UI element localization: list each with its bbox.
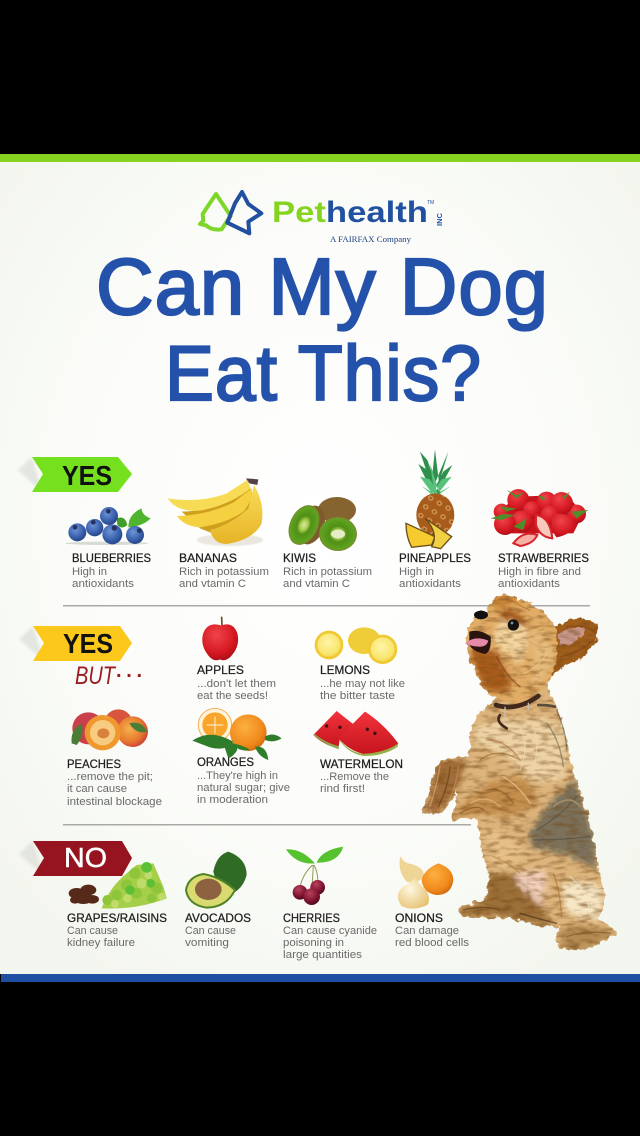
- text: strawberries: STRAWBERRIES: [498, 551, 589, 565]
- dog fur strands: [430, 597, 610, 937]
- icon: grapes and raisins: [69, 862, 167, 909]
- panel: NO: [19, 841, 469, 961]
- icon: bananas: [168, 478, 263, 546]
- text: onions: [395, 911, 469, 949]
- icon: cat and dog outlines: [200, 192, 261, 233]
- text: lemons: [320, 663, 405, 702]
- text: kiwis: [283, 551, 372, 590]
- top black band: [0, 0, 640, 154]
- bottom black band: [0, 982, 640, 1136]
- ribbon: NO: [19, 841, 132, 876]
- text: pineapples: antioxidants: [399, 578, 461, 590]
- text: avocados: Can cause: [185, 925, 236, 937]
- text: bananas: Rich in potassium: [179, 566, 269, 578]
- text: oranges: ORANGES: [197, 755, 254, 769]
- text: onions: red blood cells: [395, 937, 469, 949]
- text: oranges: in moderation: [197, 794, 268, 806]
- text: bananas: [179, 551, 269, 590]
- text: strawberries: antioxidants: [498, 578, 560, 590]
- text: grapes: [67, 911, 167, 949]
- dog body: [422, 680, 617, 950]
- logo: Pethealth: [200, 192, 444, 244]
- panel: YES: [18, 449, 589, 590]
- text: blueberries: BLUEBERRIES: [72, 551, 151, 565]
- ribbon: YES BUT: BUT: [75, 662, 116, 690]
- text: oranges: [197, 755, 290, 806]
- text: peaches: PEACHES: [67, 757, 121, 771]
- INC: INC: [435, 212, 444, 226]
- dog face: [465, 611, 519, 654]
- poster background: [0, 162, 640, 974]
- dog illustration: [422, 594, 617, 950]
- title: [96, 242, 549, 417]
- text: strawberries: [498, 551, 589, 590]
- text: onions: ONIONS: [395, 911, 443, 925]
- text: avocados: AVOCADOS: [185, 911, 251, 925]
- ribbon: YES: [18, 457, 132, 492]
- text: cherries: [283, 911, 377, 961]
- text: grapes: Can cause: [67, 925, 118, 937]
- icon: pineapple: [406, 449, 454, 549]
- dog collar: [496, 696, 555, 728]
- icon: cherries: [286, 847, 343, 905]
- text: avocados: vomiting: [185, 937, 229, 949]
- text: watermelon: rind first!: [320, 783, 365, 795]
- text: pineapples: [399, 551, 471, 590]
- text: lemons: the bitter taste: [320, 690, 395, 702]
- bottom blue bar: [1, 974, 640, 982]
- icon: strawberries: [491, 489, 588, 546]
- text: apples: eat the seeds!: [197, 690, 268, 702]
- text: lemons: LEMONS: [320, 663, 370, 677]
- text: kiwis: Rich in potassium: [283, 566, 372, 578]
- text: cherries: Can cause cyanide: [283, 925, 377, 937]
- icon: apple: [202, 617, 238, 660]
- ribbon: YES: YES: [62, 460, 112, 491]
- text: kiwis: KIWIS: [283, 551, 316, 565]
- text: kiwis: and vtamin C: [283, 578, 350, 590]
- icon: watermelon: [313, 711, 398, 756]
- text: oranges: natural sugar; give: [197, 782, 290, 794]
- icon: peaches: [71, 709, 148, 750]
- text: blueberries: antioxidants: [72, 578, 134, 590]
- ribbon: NO: NO: [64, 842, 107, 873]
- text: peaches: intestinal blockage: [67, 796, 162, 808]
- text: cherries: large quantities: [283, 949, 362, 961]
- icon: avocado: [186, 852, 247, 908]
- text: pineapples: PINEAPPLES: [399, 551, 471, 565]
- text: apples: APPLES: [197, 663, 244, 677]
- text: cherries: poisoning in: [283, 937, 344, 949]
- icon: lemons: [315, 627, 397, 664]
- icon: onions: [398, 856, 453, 909]
- text: oranges: ...They're high in: [197, 770, 278, 782]
- text: watermelon: WATERMELON: [320, 757, 403, 771]
- wordmark: Pethealth: [272, 196, 428, 229]
- trademark: TM: [427, 200, 434, 206]
- text: apples: ...don't let them: [197, 678, 276, 690]
- top green bar: [0, 154, 640, 162]
- text: watermelon: [320, 757, 403, 795]
- text: blueberries: High in: [72, 566, 107, 578]
- text: watermelon: ...Remove the: [320, 771, 389, 783]
- title line 2: Eat This?: [165, 329, 482, 417]
- text: bananas: and vtamin C: [179, 578, 246, 590]
- text: apples: [197, 663, 276, 702]
- text: peaches: ...remove the pit;: [67, 771, 153, 783]
- icon: blueberries: [65, 507, 151, 545]
- text: cherries: CHERRIES: [283, 911, 340, 925]
- text: grapes: GRAPES/RAISINS: [67, 911, 167, 925]
- panel: YES BUT: [19, 617, 405, 808]
- text: blueberries: [72, 551, 151, 590]
- ribbon: YES BUT: [19, 626, 142, 690]
- text: strawberries: High in fibre and: [498, 566, 581, 578]
- title line 1: Can My Dog: [96, 242, 549, 331]
- text: onions: Can damage: [395, 925, 459, 937]
- text: avocados: [185, 911, 251, 949]
- icon: kiwis: [282, 497, 357, 551]
- text: bananas: BANANAS: [179, 551, 237, 565]
- dog head: [466, 594, 598, 705]
- text: peaches: it can cause: [67, 783, 127, 795]
- ribbon: YES BUT: ...: [116, 660, 142, 682]
- text: peaches: [67, 757, 162, 808]
- ribbon: YES BUT: YES: [63, 628, 113, 659]
- text: lemons: ...he may not like: [320, 678, 405, 690]
- icon: oranges: [192, 708, 282, 760]
- text: pineapples: High in: [399, 566, 434, 578]
- tagline: A FAIRFAX Company: [330, 234, 412, 244]
- text: grapes: kidney failure: [67, 937, 135, 949]
